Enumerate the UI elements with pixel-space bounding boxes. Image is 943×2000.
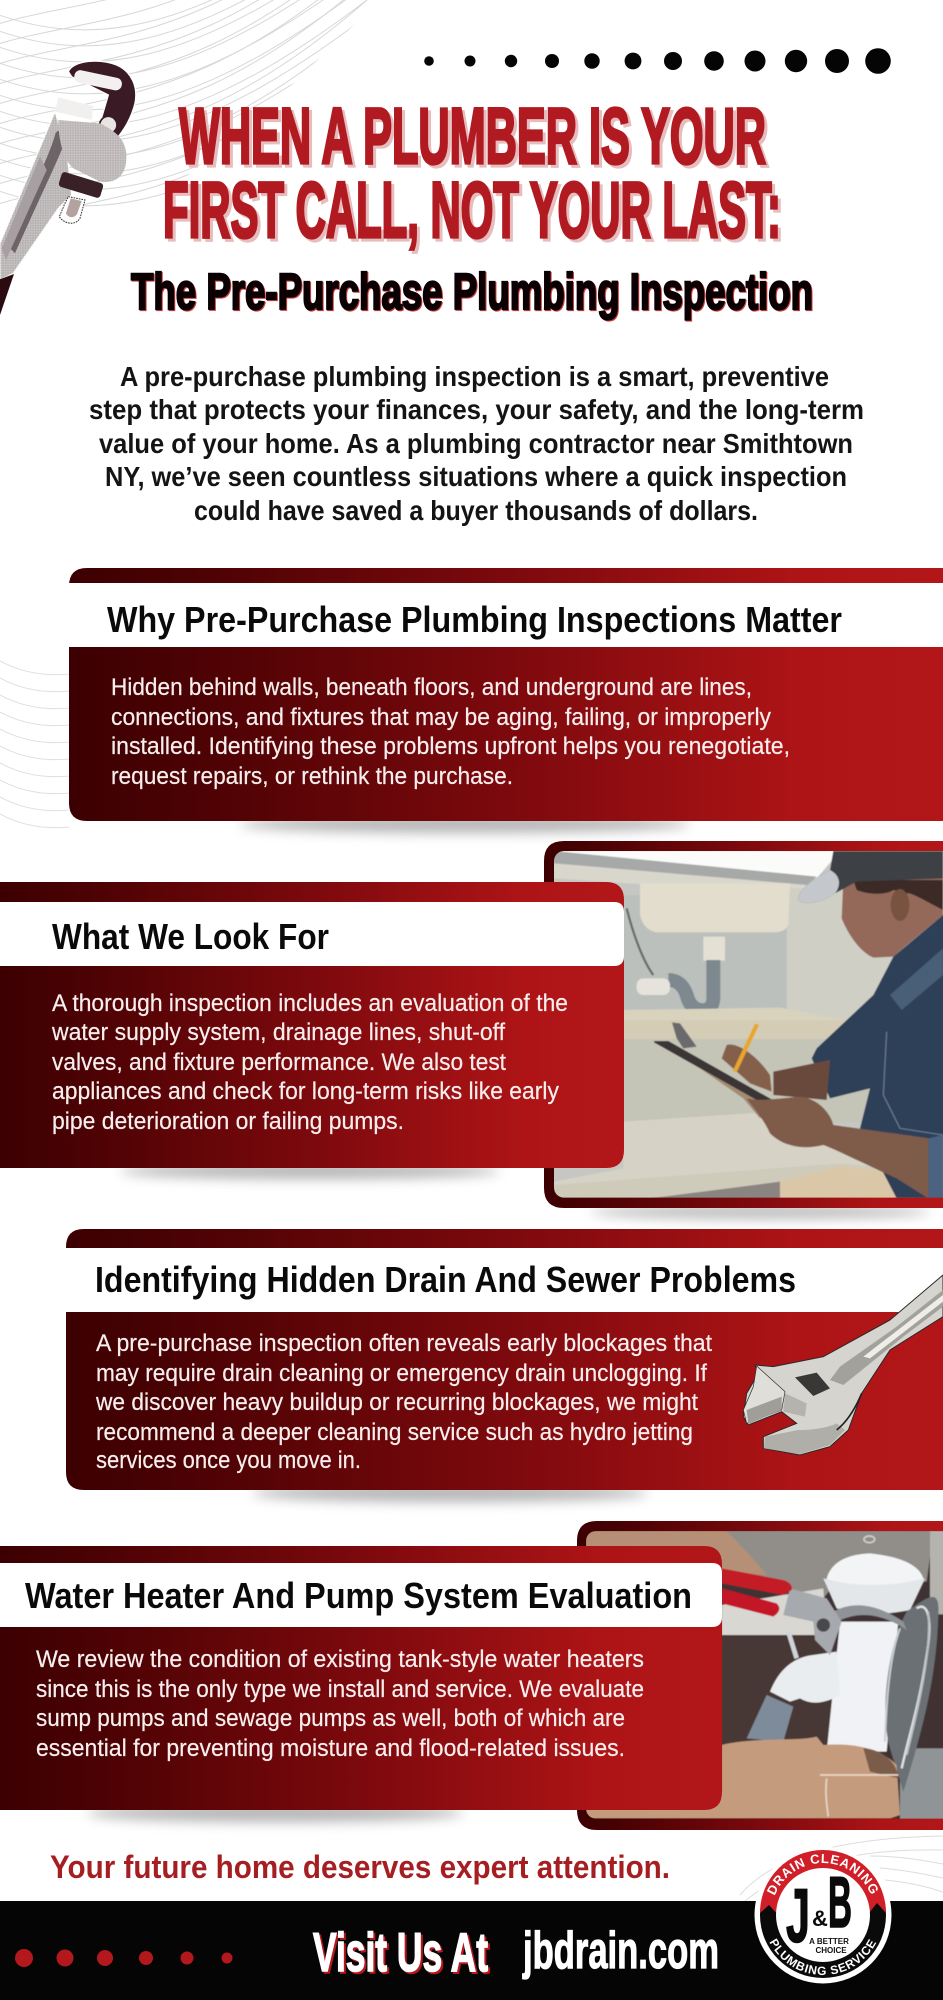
- background wave lines, left of first panel: [0, 660, 69, 828]
- body text: A thorough inspection includes an evaluation of the: [52, 990, 568, 1017]
- photo: pipe repair with pliers and water: [570, 1515, 943, 1848]
- body text: [51, 990, 568, 1135]
- intro paragraph: NY, we’ve seen countless situations where a quick inspection: [105, 461, 847, 492]
- intro paragraph: [89, 361, 864, 526]
- logo: J&B plumbing service: [754, 1847, 892, 1984]
- logo monogram: J: [786, 1874, 810, 1959]
- panel: water heater and pump evaluation: [0, 1546, 722, 1822]
- website: jbdrain.com: [522, 1922, 719, 1980]
- heading: What We Look For: [52, 916, 329, 957]
- body text: valves, and fixture performance. We also test: [52, 1049, 506, 1076]
- footer bar: [0, 1901, 943, 2000]
- logo monogram: CHOICE: [815, 1946, 847, 1955]
- background wave lines, behind logo: [740, 1836, 943, 1901]
- intro paragraph: step that protects your finances, your safety, and the long-term: [89, 394, 864, 425]
- body text: since this is the only type we install and service. We evaluate: [36, 1676, 644, 1703]
- intro paragraph: A pre-purchase plumbing inspection is a smart, preventive: [120, 361, 829, 392]
- dotted row decoration: [424, 48, 891, 74]
- intro paragraph: value of your home. As a plumbing contractor near Smithtown: [99, 428, 853, 459]
- body text: A pre-purchase inspection often reveals early blockages that: [96, 1330, 712, 1357]
- icon: adjustable wrench: [743, 1275, 943, 1455]
- body text: installed. Identifying these problems upfront helps you renegotiate,: [111, 733, 790, 760]
- body text: may require drain cleaning or emergency drain unclogging. If: [96, 1360, 707, 1387]
- call to action line: Your future home deserves expert attention.: [50, 1849, 670, 1885]
- body text: appliances and check for long-term risks like early: [52, 1078, 560, 1105]
- panel: what we look for: [0, 882, 624, 1179]
- icon: pipe wrench: [0, 61, 136, 315]
- visit us label: Visit Us At: [313, 1921, 488, 1983]
- logo: J&B plumbing service: B: [828, 1863, 852, 1943]
- panel: hidden drain and sewer problems: [66, 1229, 943, 1502]
- title: [163, 91, 781, 254]
- logo ring text lower: PLUMBING SERVICE: [770, 1938, 876, 1976]
- background wave lines, top left: [0, 0, 368, 210]
- body text: services once you move in.: [96, 1447, 361, 1474]
- body text: We review the condition of existing tank-style water heaters: [36, 1646, 644, 1673]
- body text: [95, 1330, 712, 1474]
- logo monogram: &: [812, 1906, 828, 1931]
- body text: water supply system, drainage lines, shut-off: [51, 1019, 505, 1046]
- logo monogram: [786, 1863, 852, 1959]
- logo ring text: DRAIN CLEANING: [766, 1854, 878, 1896]
- body text: sump pumps and sewage pumps as well, both of which are: [36, 1705, 625, 1732]
- body text: we discover heavy buildup or recurring blockages, we might: [95, 1389, 698, 1416]
- photo: plumber inspecting under sink: [540, 835, 943, 1219]
- body text: recommend a deeper cleaning service such as hydro jetting: [96, 1419, 693, 1446]
- logo monogram: A BETTER: [809, 1937, 849, 1946]
- body text: request repairs, or rethink the purchase.: [111, 763, 513, 790]
- heading: Why Pre-Purchase Plumbing Inspections Matter: [107, 599, 842, 640]
- intro paragraph: could have saved a buyer thousands of dollars.: [194, 495, 758, 526]
- red dots: [15, 1949, 232, 1967]
- body text: Hidden behind walls, beneath floors, and underground are lines,: [111, 674, 752, 701]
- body text: pipe deterioration or failing pumps.: [52, 1108, 404, 1135]
- body text: connections, and fixtures that may be aging, failing, or improperly: [111, 704, 772, 731]
- body text: essential for preventing moisture and flood-related issues.: [36, 1735, 625, 1762]
- heading: Water Heater And Pump System Evaluation: [25, 1575, 692, 1616]
- heading: Identifying Hidden Drain And Sewer Problems: [95, 1259, 796, 1300]
- panel: why inspections matter: [69, 568, 943, 833]
- body text: [36, 1646, 644, 1762]
- body text: [111, 674, 790, 790]
